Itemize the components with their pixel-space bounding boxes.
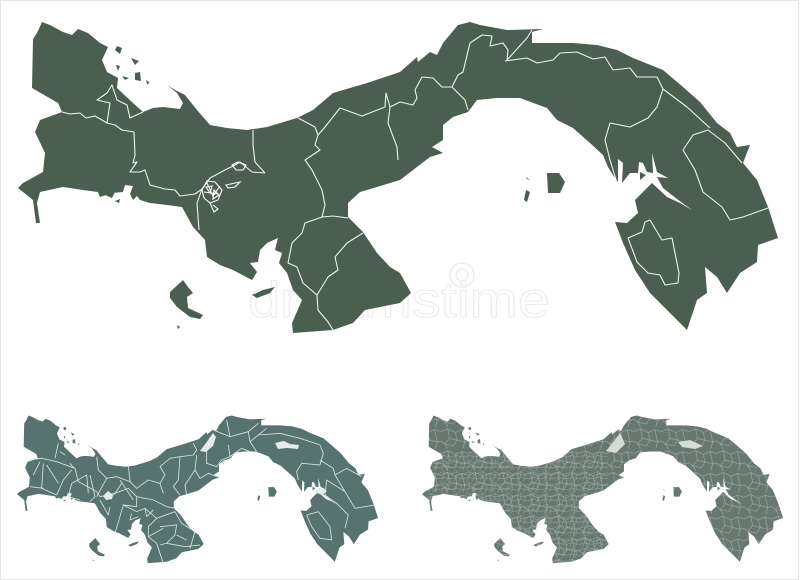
map: Panama provinces (large) <box>18 22 778 333</box>
urban clusters <box>103 433 327 500</box>
watermark: dreamstime: dreamstime <box>248 272 550 328</box>
urban clusters <box>606 433 703 453</box>
map: Panama sub-districts (small, right) <box>422 416 783 564</box>
sub-district mesh <box>424 416 783 563</box>
provincial borders <box>62 30 768 330</box>
urban district cluster <box>202 162 246 212</box>
district borders <box>28 420 375 563</box>
map: Panama districts (small, left) <box>17 415 378 563</box>
